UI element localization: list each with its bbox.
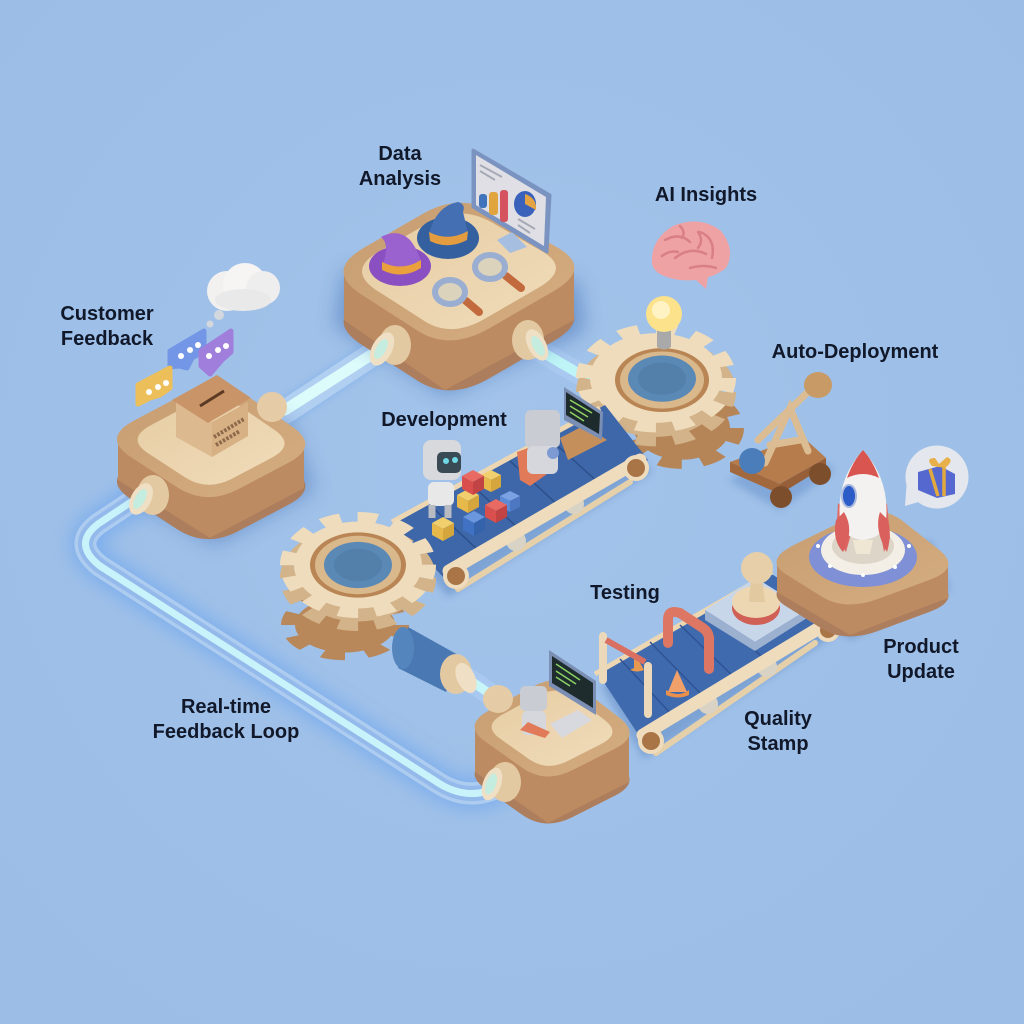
panel: connecting pipe data to insights: [530, 345, 590, 380]
label: Quality Stamp: Quality: [744, 708, 812, 730]
icon: rocket: [835, 450, 890, 554]
label: Product Update: Update: [887, 661, 955, 683]
wheel rollers: [698, 657, 777, 714]
upper gear: [292, 520, 424, 610]
panel: development conveyor: [392, 405, 652, 597]
inner plate: [362, 214, 556, 329]
block cluster: [432, 470, 520, 541]
upper gear: [588, 332, 724, 424]
panel: product update block: [777, 450, 950, 640]
icon: monitor chart: [473, 150, 550, 253]
connector back: [483, 685, 513, 713]
front rail: [643, 619, 834, 735]
icon: red arch: [668, 612, 709, 669]
label: Data Analysis: Analysis: [359, 168, 441, 190]
label: Customer Feedback: Feedback: [61, 328, 154, 350]
connector back: [257, 392, 287, 422]
lower belt band: [458, 482, 630, 589]
icon: robot with blocks: [423, 440, 520, 541]
icon: magnifier left: [435, 280, 479, 312]
lower gear: [632, 395, 732, 461]
icon: yellow speech bubble: [138, 368, 170, 404]
label: Development: Development: [381, 409, 507, 431]
panel: connecting pipe gear to development block: [452, 668, 496, 698]
title labels: [60, 143, 959, 755]
label: Testing: Testing: [590, 582, 660, 604]
inner plate: [138, 397, 285, 485]
icon: launch pad: [809, 525, 917, 587]
icon: brain: [652, 222, 730, 289]
inner plate: [492, 691, 612, 766]
icon: blue speech bubble: [170, 331, 204, 368]
front rail: [449, 460, 640, 571]
icon: stamp on tray: [705, 552, 807, 651]
upper gear depth: [588, 346, 724, 438]
icon: blue spool: [392, 627, 481, 696]
label: Quality Stamp: Stamp: [747, 733, 809, 755]
icon: purple speech bubble: [201, 331, 231, 374]
end rollers: [443, 455, 649, 589]
icon: blue hat: [417, 202, 479, 259]
label: Real-time Feedback Loop: Feedback Loop: [153, 721, 299, 743]
panel: development block: [475, 650, 630, 824]
connector right: [512, 320, 553, 364]
panel: connecting pipe feedback to data: [285, 346, 385, 412]
panel: data analysis block: [335, 150, 585, 395]
lower gear: [293, 596, 397, 654]
connector left: [365, 325, 411, 370]
icon: cloud: [206, 263, 280, 328]
icon: ballot box: [172, 375, 251, 457]
panel: testing conveyor: [595, 572, 842, 759]
connector front: [478, 762, 521, 803]
icon: small robot at computer: [520, 650, 596, 738]
icon: catapult: [728, 372, 835, 510]
label: Product Update: Product: [883, 636, 959, 658]
label: AI Insights: AI Insights: [655, 184, 757, 206]
panel: gear lower left: [292, 520, 424, 654]
label: Customer Feedback: Customer: [60, 303, 154, 325]
icon: traffic cone: [666, 670, 689, 698]
label: Data Analysis: Data: [378, 143, 422, 165]
icon: purple hat: [369, 233, 431, 286]
icon: gift bubble: [905, 446, 968, 508]
label: Auto-Deployment: Auto-Deployment: [772, 341, 939, 363]
label: Real-time Feedback Loop: Real-time: [181, 696, 271, 718]
connector front: [124, 475, 169, 519]
wheel rollers: [506, 494, 584, 551]
panel: gear AI insights: [588, 332, 732, 461]
lower belt band: [656, 643, 815, 753]
icon: light bulb: [646, 296, 682, 350]
panel: customer feedback block: [117, 375, 315, 545]
icon: magnifier right: [475, 255, 521, 288]
icon: hurdle: [603, 636, 648, 714]
panel: real-time feedback loop pipe: [85, 496, 500, 794]
upper gear depth: [292, 533, 424, 623]
icon: robot at computer: [517, 387, 607, 486]
end rollers: [638, 618, 840, 754]
